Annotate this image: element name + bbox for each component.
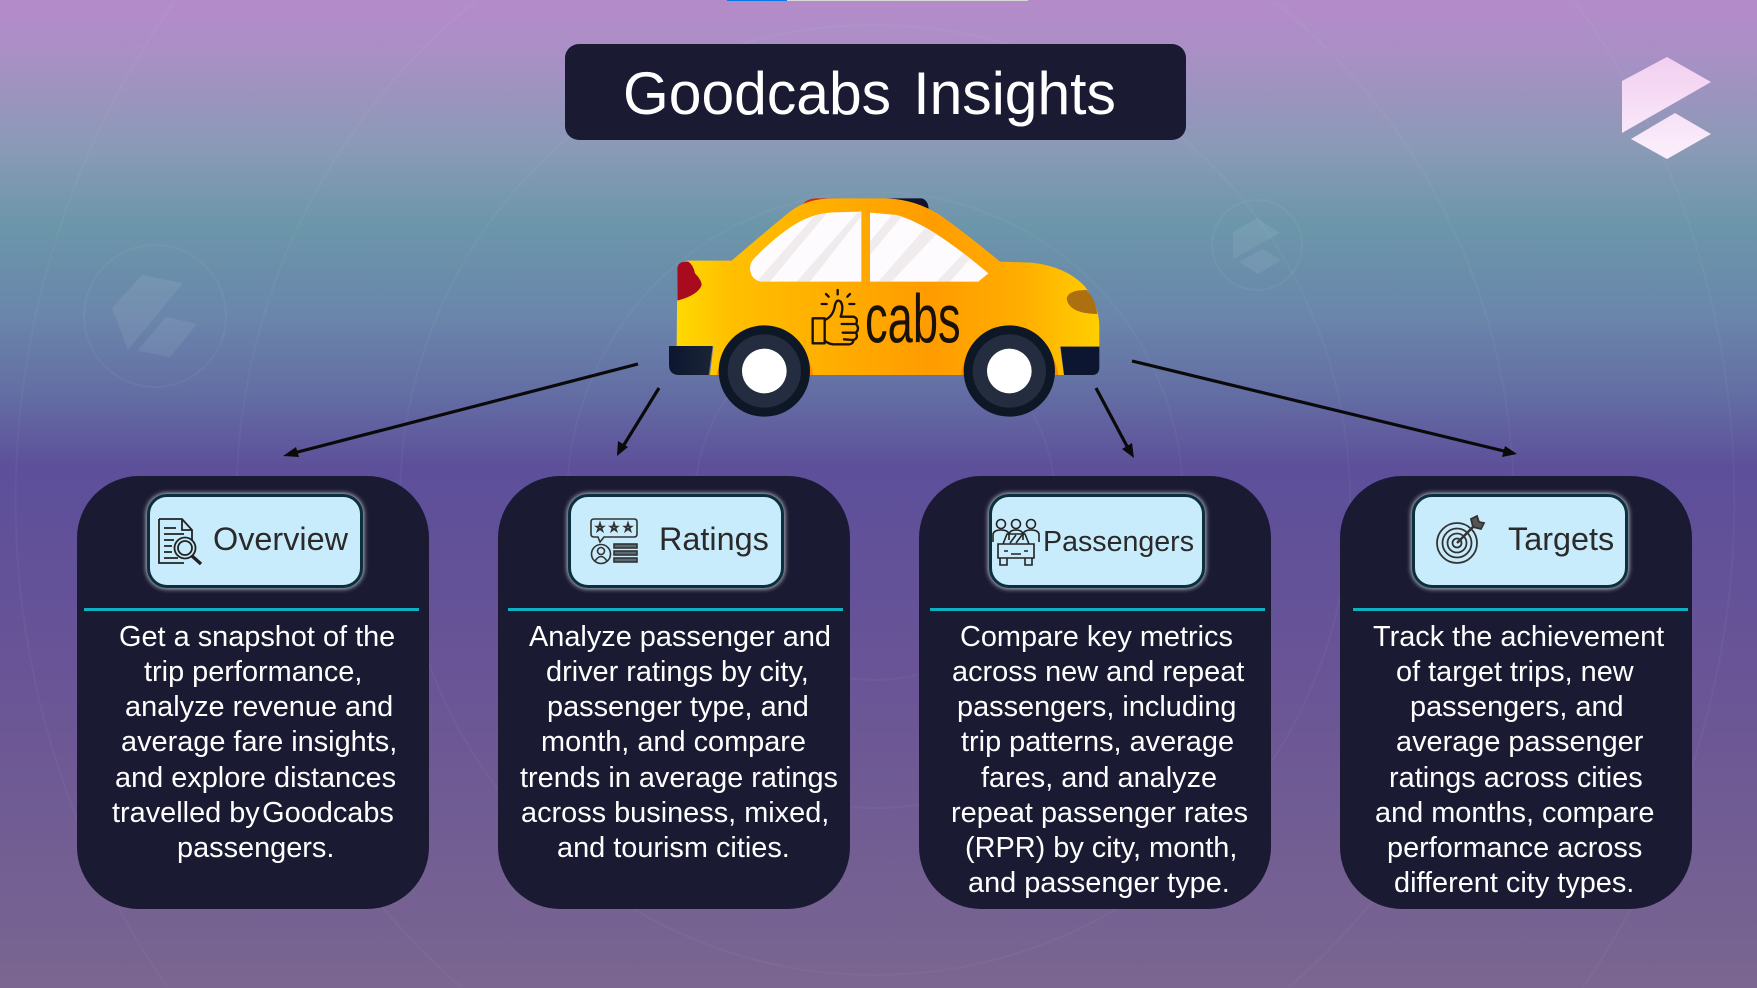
ratings description: Analyze passenger and [529, 621, 831, 653]
targets description: ratings across cities [1389, 762, 1643, 794]
panel: passengers [919, 476, 1271, 909]
windows [750, 212, 988, 282]
icon: document with magnifier [158, 518, 202, 566]
icon: thumbs up [813, 290, 858, 344]
panel: overview [77, 476, 429, 909]
targets description: of target trips, new [1396, 656, 1634, 688]
ratings description: month, and compare [541, 726, 806, 758]
overview label: Overview [213, 521, 348, 557]
passengers description: Compare key metrics [960, 621, 1233, 653]
targets description: average passenger [1396, 726, 1643, 758]
title: Goodcabs Insights [623, 60, 1116, 127]
ratings description: trends in average ratings [520, 762, 838, 794]
watermark logo left [112, 275, 196, 357]
panel: ratings [498, 476, 850, 909]
passengers description: across new and repeat [952, 656, 1244, 688]
targets description: Track the achievement [1373, 621, 1664, 653]
icon: star rating and user [590, 518, 638, 564]
tail light [677, 262, 702, 301]
wheel front [961, 325, 1058, 417]
overview tab [147, 494, 363, 588]
logo text: cabs [865, 281, 961, 357]
head light [1067, 290, 1097, 314]
overview description [112, 621, 397, 864]
targets description: and months, compare [1375, 797, 1654, 829]
overview description: average fare insights, [121, 726, 397, 758]
car body [677, 198, 1099, 375]
passengers label: Passengers [1043, 526, 1194, 558]
watermark logo right [1233, 218, 1280, 274]
overview description: passengers. [177, 832, 334, 864]
overview description: trip performance, [144, 656, 362, 688]
passengers description: repeat passenger rates [951, 797, 1248, 829]
targets description [1373, 621, 1664, 899]
targets description: performance across [1387, 832, 1642, 864]
logo top right [1622, 57, 1711, 159]
icon: target with arrow [1436, 514, 1486, 564]
ratings tab [568, 494, 784, 588]
overview description: analyze revenue and [125, 691, 393, 723]
passengers description: passengers, including [957, 691, 1236, 723]
targets label: Targets [1508, 521, 1614, 557]
targets tab [1412, 494, 1628, 588]
ratings label: Ratings [659, 521, 769, 557]
targets description: passengers, and [1410, 691, 1624, 723]
overview description: and explore distances [115, 762, 396, 794]
icon: passengers and car [992, 518, 1040, 566]
passengers description: trip patterns, average [961, 726, 1234, 758]
targets description: different city types. [1394, 867, 1634, 899]
ratings description: driver ratings by city, [546, 656, 809, 688]
bumpers [669, 346, 1099, 375]
wheel rear [717, 325, 813, 417]
passengers description [951, 621, 1248, 899]
passengers description: and passenger type. [968, 867, 1230, 899]
illustration: yellow cab [669, 198, 1100, 417]
passengers description: fares, and analyze [981, 762, 1217, 794]
overview description: travelled by Goodcabs [112, 797, 394, 829]
ratings description: passenger type, and [547, 691, 809, 723]
roof lights [803, 198, 929, 209]
passengers tab [989, 494, 1205, 588]
panel: targets [1340, 476, 1692, 909]
ratings description [520, 621, 838, 864]
ratings description: across business, mixed, [521, 797, 829, 829]
title [565, 44, 1186, 140]
overview description: Get a snapshot of the [119, 621, 395, 653]
progress bar [727, 0, 1028, 1]
passengers description: (RPR) by city, month, [965, 832, 1237, 864]
ratings description: and tourism cities. [557, 832, 790, 864]
